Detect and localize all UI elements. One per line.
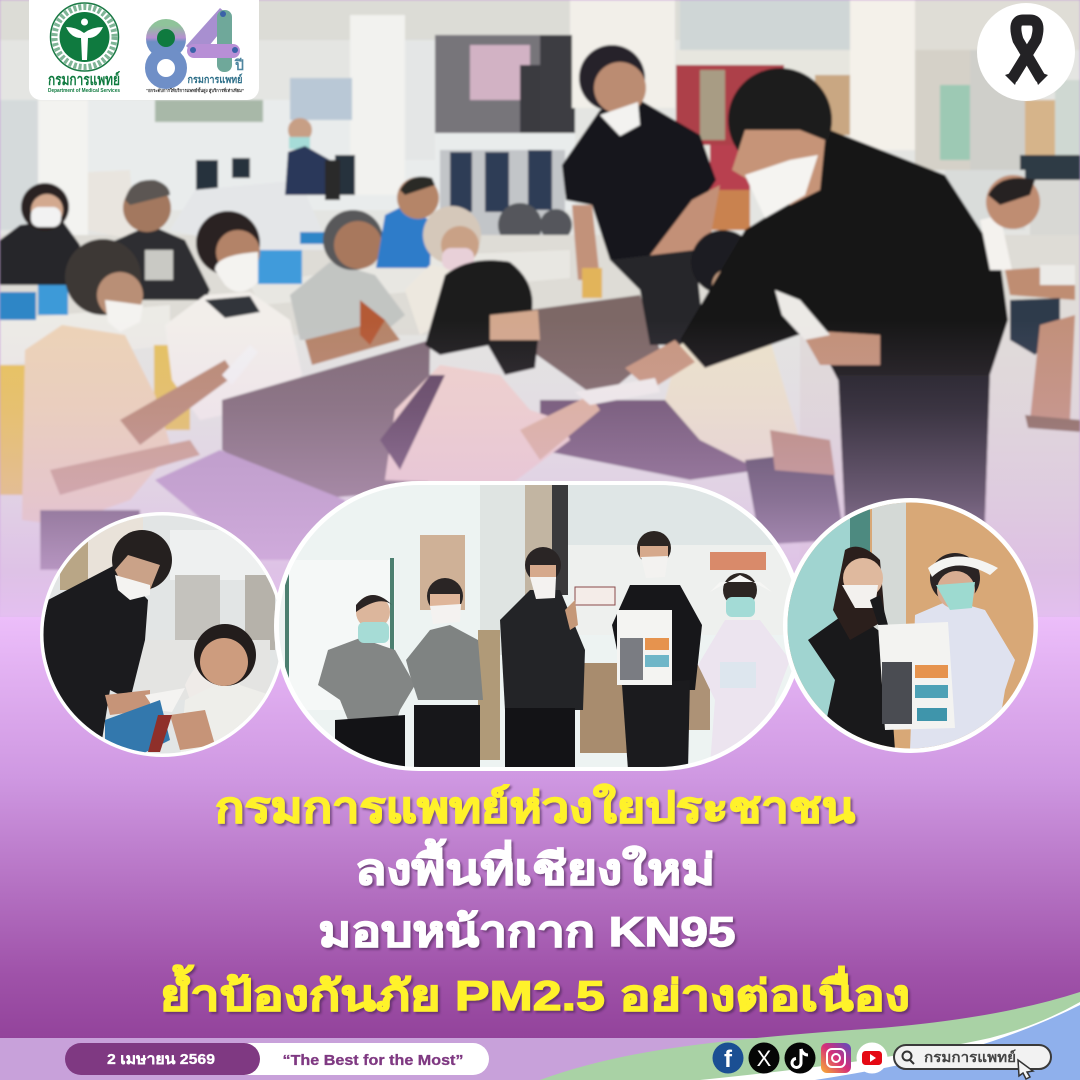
nurse xyxy=(910,553,1015,750)
date: 2 เมษายน 2569 xyxy=(107,1051,215,1068)
woman with white mask xyxy=(406,578,483,770)
icon: X xyxy=(748,1042,780,1074)
photo circle right xyxy=(783,498,1038,754)
man in blue hoodie xyxy=(376,176,439,268)
year label: ปี xyxy=(234,57,244,73)
sofa xyxy=(155,295,760,560)
woman with black mask xyxy=(380,260,600,485)
search text: กรมการแพทย์ xyxy=(924,1049,1016,1065)
photo circle left xyxy=(40,510,285,760)
elder woman xyxy=(405,206,481,335)
speaker xyxy=(808,547,895,750)
logo panel xyxy=(29,0,259,100)
icon: Instagram xyxy=(821,1043,851,1073)
search bar xyxy=(894,1045,1051,1079)
old man xyxy=(105,180,210,300)
headline line 1: กรมการแพทย์ห่วงใยประชาชน xyxy=(215,783,855,831)
man in black polo standing xyxy=(562,45,720,345)
back man xyxy=(285,118,340,200)
photo panel center xyxy=(274,481,804,771)
man in black jacket xyxy=(500,547,585,770)
date and motto pill xyxy=(65,1043,489,1075)
logo: 84 years xyxy=(146,8,244,94)
icon: cursor xyxy=(1018,1060,1033,1079)
seated woman in black xyxy=(0,183,80,285)
department name small: กรมการแพทย์ xyxy=(188,73,242,86)
headline line 2: ลงพื้นที่เชียงใหม่ xyxy=(355,838,715,893)
woman with beige blouse xyxy=(21,238,230,570)
icon: facebook: f xyxy=(724,1046,733,1073)
man in grey polo xyxy=(290,210,405,365)
man in white polo xyxy=(165,211,302,420)
footer band xyxy=(0,1038,1080,1080)
headline line 4: ย้ำป้องกันภัย PM2.5 อย่างต่อเนื่อง xyxy=(160,964,910,1019)
seated person with floral shirt xyxy=(665,230,845,545)
patient lying xyxy=(88,170,131,236)
mourning ribbon badge xyxy=(977,3,1075,101)
department name english: Department of Medical Services xyxy=(48,88,120,94)
yellow chairs xyxy=(0,365,30,495)
background gradient xyxy=(0,617,1080,1038)
woman with teal mask xyxy=(318,595,415,770)
social icons xyxy=(712,1042,888,1074)
logo: Ministry of Public Health seal xyxy=(50,3,118,71)
man holding poster xyxy=(612,531,702,770)
tagline: “ยกระดับการให้บริการแพทย์ขั้นสูง สู่บริการที่เท่าเทียม” xyxy=(146,86,244,94)
nurse holding box xyxy=(698,573,790,765)
woman receiving mask xyxy=(105,624,270,760)
headline xyxy=(160,783,910,1019)
icon: facebook xyxy=(712,1042,744,1074)
seated man on right xyxy=(980,175,1080,432)
main man in black jacket xyxy=(575,68,1008,530)
icon: YouTube xyxy=(856,1042,888,1074)
motto: “The Best for the Most” xyxy=(282,1052,464,1069)
man giving mask xyxy=(40,530,172,740)
department name: กรมการแพทย์ xyxy=(48,71,120,89)
main photo: clinic waiting room xyxy=(0,0,1080,617)
poster xyxy=(878,622,955,730)
tables and blue chairs xyxy=(0,306,170,336)
icon: X: X xyxy=(757,1046,772,1071)
icon: magnifier xyxy=(902,1052,914,1064)
icon: TikTok xyxy=(784,1042,816,1074)
headline line 3: มอบหน้ากาก KN95 xyxy=(318,908,736,955)
footer wave: green, white and blue xyxy=(540,992,1080,1080)
